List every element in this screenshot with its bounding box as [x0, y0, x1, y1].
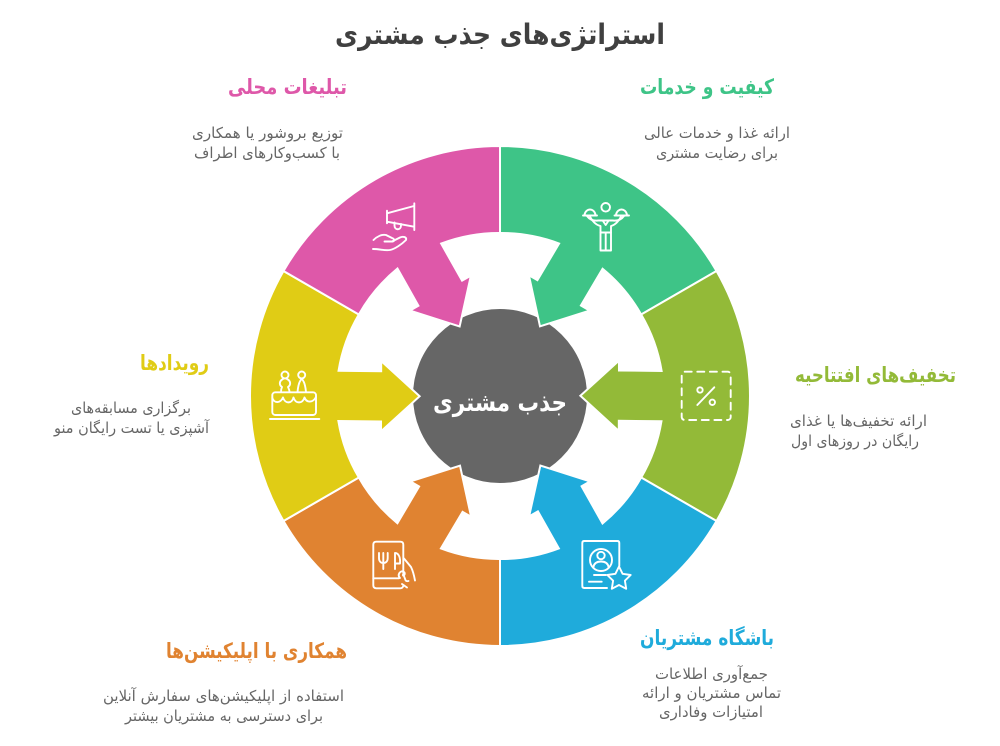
text: club description: تماس مشتریان و ارائه: [642, 684, 781, 702]
block: quality and services: [640, 75, 790, 162]
text: events description: برگزاری مسابقه‌های: [71, 399, 191, 417]
icon: percent in dashed square: [682, 372, 731, 420]
icon: member card with star: [582, 541, 631, 589]
segment arrow: opening discounts: [560, 271, 825, 549]
icon: wedding cake with couple: [270, 372, 319, 419]
heading: local advertising: تبلیغات محلی: [228, 75, 347, 99]
text: events description: [53, 399, 210, 438]
text: apps description: [103, 687, 344, 725]
block: opening discounts: [790, 363, 956, 450]
text: discounts description: [790, 412, 927, 450]
text: club description: جمع‌آوری اطلاعات: [655, 665, 768, 683]
segment arrow: quality and services: [500, 146, 716, 326]
heading: quality and services: کیفیت و خدمات: [640, 75, 775, 99]
icon: waiter with trays: [583, 203, 629, 250]
text: apps description: برای دسترسی به مشتریان بیشتر: [124, 707, 323, 725]
block: customer club: [640, 625, 781, 721]
heading: opening discounts: تخفیف‌های افتتاحیه: [795, 363, 956, 387]
text: advertising description: با کسب‌وکارهای اطراف: [194, 144, 340, 162]
text: discounts description: رایگان در روزهای اول: [791, 432, 919, 450]
text: events description: آشپزی یا تست رایگان منو: [53, 419, 210, 438]
text: club description: [642, 665, 781, 721]
text: advertising description: [192, 124, 343, 162]
text: club description: امتیازات وفاداری: [659, 703, 763, 721]
central circle: [413, 309, 587, 483]
block: events: [53, 351, 210, 438]
block: local advertising: [192, 75, 347, 162]
text: apps description: استفاده از اپلیکیشن‌های سفارش آنلاین: [103, 687, 344, 706]
segment arrow: local advertising: [283, 84, 548, 361]
segment arrow: events: [175, 243, 440, 521]
text: quality description: برای رضایت مشتری: [656, 144, 778, 162]
title: استراتژی‌های جذب مشتری: [335, 18, 665, 51]
segment arrow: customer club: [452, 431, 717, 708]
text: quality description: [644, 124, 790, 162]
heading: customer club: باشگاه مشتریان: [640, 625, 774, 650]
segment arrow: app partnerships: [284, 466, 500, 646]
icon: megaphone and hand: [373, 203, 414, 250]
text: advertising description: توزیع بروشور یا همکاری: [192, 124, 343, 142]
text: quality description: ارائه غذا و خدمات عالی: [644, 124, 790, 142]
center label: جذب مشتری: [433, 388, 567, 418]
block: app partnerships: [103, 639, 347, 725]
text: discounts description: ارائه تخفیف‌ها یا غذای: [790, 412, 927, 430]
heading: app partnerships: همکاری با اپلیکیشن‌ها: [166, 639, 347, 663]
icon: phone menu in hand: [373, 542, 415, 588]
heading: events: رویدادها: [140, 351, 209, 375]
